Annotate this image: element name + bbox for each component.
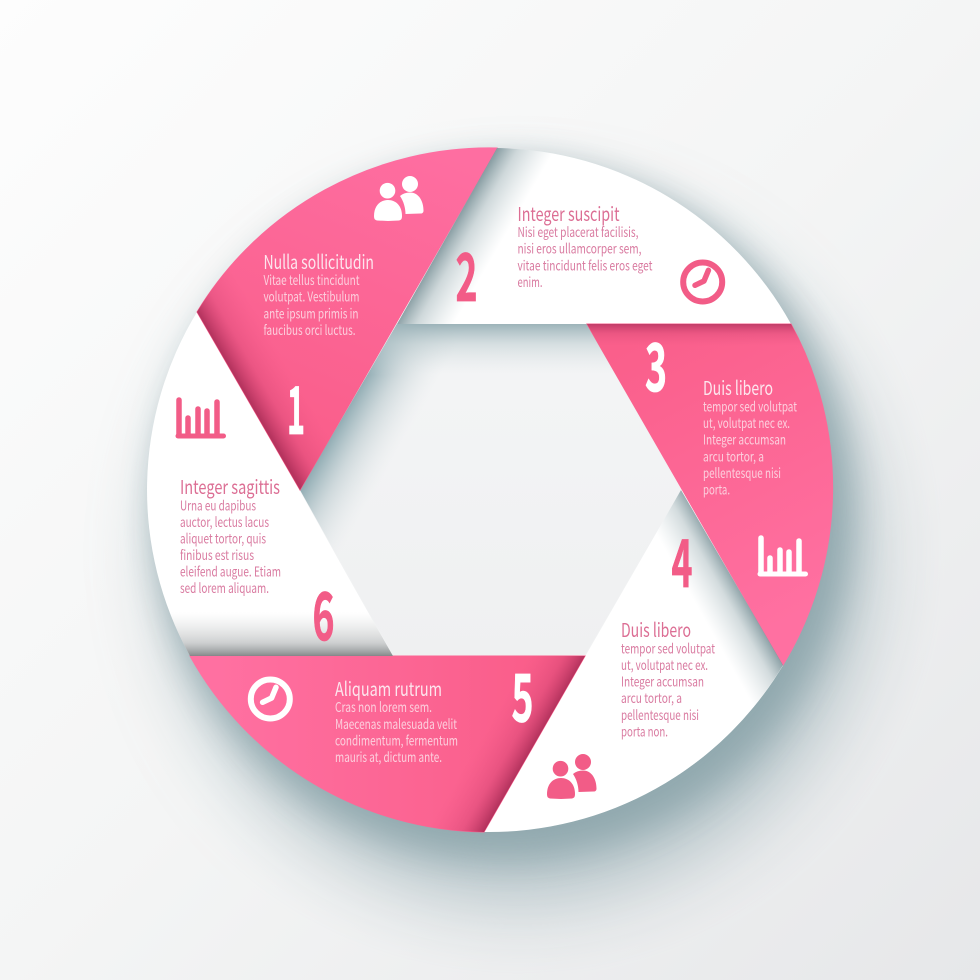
heading: Aliquam rutrum bbox=[335, 675, 442, 702]
body text: pellentesque nisi bbox=[703, 462, 781, 482]
icon: clock bbox=[683, 262, 722, 302]
body text: enim. bbox=[518, 271, 542, 291]
panel: segment 1 Nulla sollicitudin: 1 bbox=[287, 358, 305, 454]
body text: arcu tortor, a bbox=[621, 687, 682, 707]
body text: Cras non lorem sem. bbox=[335, 696, 432, 716]
ring drop shadow bbox=[158, 164, 866, 898]
panel: segment 1 Nulla sollicitudin bbox=[197, 148, 497, 490]
body text: Integer accumsan bbox=[703, 429, 786, 449]
number 5: 5 bbox=[512, 646, 534, 742]
body text: auctor, lectus lacus bbox=[180, 511, 269, 531]
body text bbox=[264, 269, 360, 339]
heading: Integer sagittis bbox=[180, 473, 280, 500]
heading: Integer suscipit bbox=[518, 200, 620, 227]
number 2: 2 bbox=[456, 225, 478, 321]
body text: Integer accumsan bbox=[621, 670, 704, 690]
panel: segment 6 Integer sagittis bbox=[147, 312, 393, 660]
body text: ante ipsum primis in bbox=[264, 302, 358, 322]
icon: clock bbox=[251, 680, 290, 718]
body text: Urna eu dapibus bbox=[180, 494, 256, 514]
number 4: 4 bbox=[672, 511, 692, 607]
ring base with folded paper shading bbox=[147, 148, 833, 832]
body text bbox=[703, 396, 797, 498]
body text bbox=[180, 494, 281, 597]
body text: Maecenas malesuada velit bbox=[335, 713, 457, 733]
body text: porta non. bbox=[621, 720, 668, 740]
number 6: 6 bbox=[312, 564, 334, 660]
body text: Nisi eget placerat facilisis, bbox=[518, 221, 638, 241]
heading: Duis libero bbox=[703, 374, 773, 401]
body text bbox=[335, 696, 458, 766]
body text: condimentum, fermentum bbox=[335, 730, 458, 750]
body text: arcu tortor, a bbox=[703, 445, 764, 465]
body text: sed lorem aliquam. bbox=[180, 577, 269, 597]
body text: porta. bbox=[703, 478, 730, 498]
heading: Duis libero bbox=[621, 616, 691, 643]
body text bbox=[518, 221, 652, 291]
panel: segment 2 Integer suscipit bbox=[397, 148, 791, 324]
body text: pellentesque nisi bbox=[621, 704, 699, 724]
body text: tempor sed volutpat bbox=[703, 396, 797, 416]
panel: segment 5 Aliquam rutrum bbox=[190, 646, 585, 832]
body text: Vitae tellus tincidunt bbox=[264, 269, 360, 289]
heading: Nulla sollicitudin bbox=[264, 248, 374, 275]
body text: aliquet tortor, quis bbox=[180, 528, 266, 548]
body text: mauris at, dictum ante. bbox=[335, 746, 442, 766]
icon: bar chart bbox=[178, 400, 224, 436]
panel: segment 3 Duis libero bbox=[587, 315, 833, 665]
body text: faucibus orci luctus. bbox=[264, 319, 356, 339]
body text: finibus est risus bbox=[180, 544, 254, 564]
body text: vitae tincidunt felis eros eget bbox=[518, 254, 652, 274]
body text: ut, volutpat nec ex. bbox=[621, 654, 708, 674]
body text bbox=[621, 637, 715, 740]
icon: people bbox=[374, 176, 424, 221]
body text: tempor sed volutpat bbox=[621, 637, 715, 657]
number 3: 3 bbox=[645, 315, 667, 411]
icon: people bbox=[547, 754, 596, 799]
panel: segment 4 Duis libero bbox=[484, 490, 783, 832]
body text: volutpat. Vestibulum bbox=[264, 286, 360, 306]
body text: eleifend augue. Etiam bbox=[180, 560, 281, 580]
body text: ut, volutpat nec ex. bbox=[703, 412, 790, 432]
body text: nisi eros ullamcorper sem, bbox=[518, 238, 642, 258]
icon: bar chart bbox=[760, 538, 806, 574]
